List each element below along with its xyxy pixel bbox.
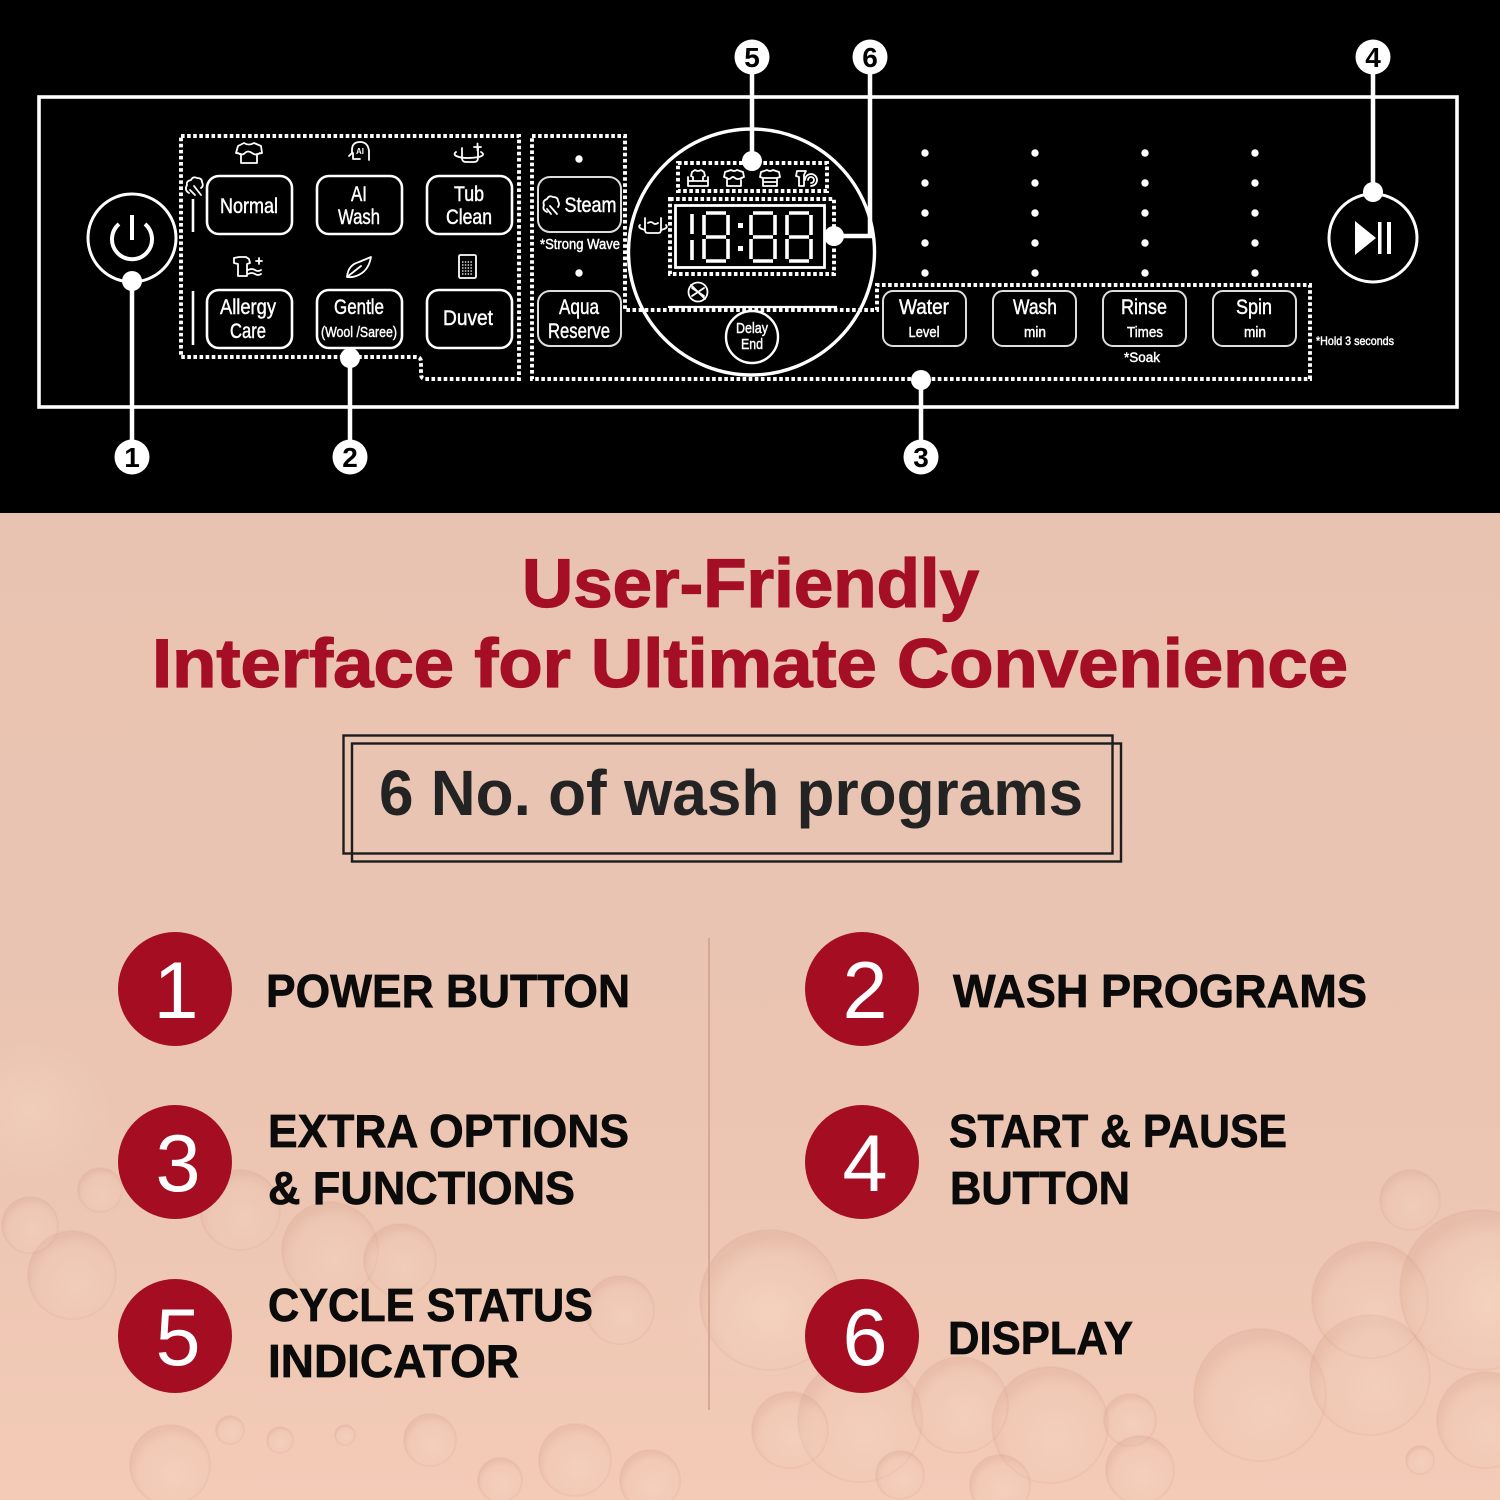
soak note: *Soak — [1124, 349, 1161, 365]
icon: duvet grid — [459, 255, 476, 278]
button: Wash min — [993, 291, 1076, 346]
callout 5 — [734, 40, 770, 171]
button: Gentle: Gentle — [334, 296, 384, 319]
item 1: power button: POWER BUTTON — [266, 965, 630, 1017]
item 5: cycle status indicator — [118, 1279, 593, 1393]
button: Allergy Care: Allergy — [220, 296, 276, 319]
button: Rinse Times: Times — [1127, 324, 1163, 341]
callout 3: 3 — [913, 442, 929, 473]
title: Interface for Ultimate Convenience — [152, 625, 1348, 702]
callout 3 — [904, 370, 938, 474]
icon: allergy shirt — [234, 257, 262, 276]
icon: wash shirt — [724, 170, 744, 186]
programs callout box: 6 No. of wash programs — [379, 757, 1083, 829]
item 2: wash programs: WASH PROGRAMS — [953, 965, 1367, 1017]
aqua reserve button — [538, 291, 621, 346]
wash program icons — [186, 142, 483, 345]
item 6: display — [805, 1279, 1133, 1393]
item 3: extra options and functions — [118, 1105, 629, 1219]
item 3: extra options and functions: & FUNCTIONS — [268, 1162, 575, 1214]
wash program buttons — [207, 176, 512, 348]
icon: rinse shirt — [760, 170, 780, 186]
level indicator dots — [921, 149, 1259, 277]
steam button with icon — [538, 177, 621, 232]
button: Rinse Times: Rinse — [1121, 296, 1167, 319]
button: Wash min: min — [1024, 324, 1046, 341]
control panel outline frame — [39, 97, 1457, 407]
button: Tub Clean: Clean — [446, 206, 492, 229]
strong wave note: *Strong Wave — [540, 236, 620, 253]
button: Tub Clean: Tub — [454, 183, 484, 206]
item 6: display: 6 — [842, 1293, 888, 1383]
callout 4: 4 — [1365, 42, 1381, 73]
callout 2 — [332, 348, 368, 474]
icon: wash tub shirt — [688, 170, 708, 186]
button: AI Wash: AI — [351, 183, 367, 206]
programs callout box — [344, 736, 1121, 862]
steam and aqua indicator dots — [575, 155, 583, 277]
item 3: extra options and functions: 3 — [155, 1119, 201, 1209]
power button — [88, 194, 176, 282]
delay end button: Delay — [736, 320, 768, 337]
dotted group: wash programs — [181, 136, 519, 379]
button: Gentle — [317, 290, 402, 348]
dotted group: display — [670, 199, 834, 274]
hold 3 seconds note: *Hold 3 seconds — [1316, 334, 1394, 348]
button: Spin min: min — [1244, 324, 1266, 341]
callout 1 — [114, 271, 150, 474]
button: Allergy Care: Care — [230, 320, 266, 343]
item 3: extra options and functions: EXTRA OPTIONS — [268, 1105, 629, 1157]
steam button with icon: Steam — [564, 194, 616, 217]
item 5: cycle status indicator: CYCLE STATUS — [268, 1279, 593, 1331]
item 4: start and pause button: START & PAUSE — [949, 1105, 1287, 1157]
item 4: start and pause button — [805, 1105, 1287, 1219]
digital display readout — [676, 206, 824, 268]
button: Duvet — [427, 290, 512, 348]
button: Water Level — [883, 291, 966, 346]
button: Tub Clean — [427, 176, 512, 234]
callout 1: 1 — [124, 442, 140, 473]
display dial ring — [628, 129, 874, 375]
item 2: wash programs: 2 — [842, 946, 888, 1036]
dotted group: extra options and functions — [532, 136, 1310, 379]
callout 6: 6 — [862, 42, 878, 73]
item 1: power button: 1 — [153, 946, 199, 1036]
title: User-Friendly — [522, 545, 979, 622]
icon: no-cut circle — [688, 282, 708, 302]
icon: steam cloud — [186, 177, 203, 195]
delay end button: End — [741, 336, 763, 353]
button: Rinse Times — [1103, 291, 1186, 346]
option buttons — [883, 291, 1296, 346]
delay end button — [726, 311, 778, 363]
item 5: cycle status indicator: 5 — [155, 1293, 201, 1383]
icon: tub wave — [639, 218, 667, 233]
cycle status icons — [688, 170, 817, 186]
button: AI Wash — [317, 176, 402, 234]
title — [152, 545, 1348, 702]
button: Water Level: Water — [899, 296, 949, 319]
icon: tub clean — [455, 144, 483, 162]
icon: AI head: AI — [356, 147, 364, 156]
side indicator bars — [192, 199, 194, 345]
callout 5: 5 — [744, 42, 760, 73]
background: peach panel with soap bubbles — [0, 513, 1500, 1500]
icon: normal shirt — [236, 143, 262, 163]
item 6: display: DISPLAY — [948, 1312, 1133, 1364]
icon: spin shirt — [796, 171, 817, 186]
item 2: wash programs — [805, 932, 1367, 1046]
center divider — [708, 938, 710, 1410]
button: AI Wash: Wash — [338, 206, 380, 229]
icon: feather — [347, 257, 371, 277]
black control panel band — [0, 0, 1500, 513]
button: Duvet: Duvet — [443, 307, 493, 330]
callout 4 — [1356, 40, 1390, 202]
button: Normal: Normal — [220, 195, 278, 218]
dotted group: cycle status — [678, 163, 827, 191]
button: Spin min — [1213, 291, 1296, 346]
start and pause button — [1329, 194, 1417, 282]
button: Water Level: Level — [908, 324, 940, 341]
callout 6 — [824, 40, 888, 246]
item 4: start and pause button: BUTTON — [950, 1162, 1130, 1214]
aqua reserve button: Aqua — [559, 296, 599, 319]
divider beneath display — [668, 306, 837, 308]
item 4: start and pause button: 4 — [842, 1119, 888, 1209]
icon: AI head — [349, 142, 369, 160]
button: Allergy Care — [207, 290, 292, 348]
button: Normal — [207, 176, 292, 234]
item 1: power button — [118, 932, 630, 1046]
aqua reserve button: Reserve — [548, 320, 610, 343]
button: Gentle: (Wool /Saree) — [321, 324, 397, 341]
item 5: cycle status indicator: INDICATOR — [268, 1335, 519, 1387]
button: Wash min: Wash — [1013, 296, 1057, 319]
callout 2: 2 — [342, 442, 358, 473]
button: Spin min: Spin — [1236, 296, 1272, 319]
